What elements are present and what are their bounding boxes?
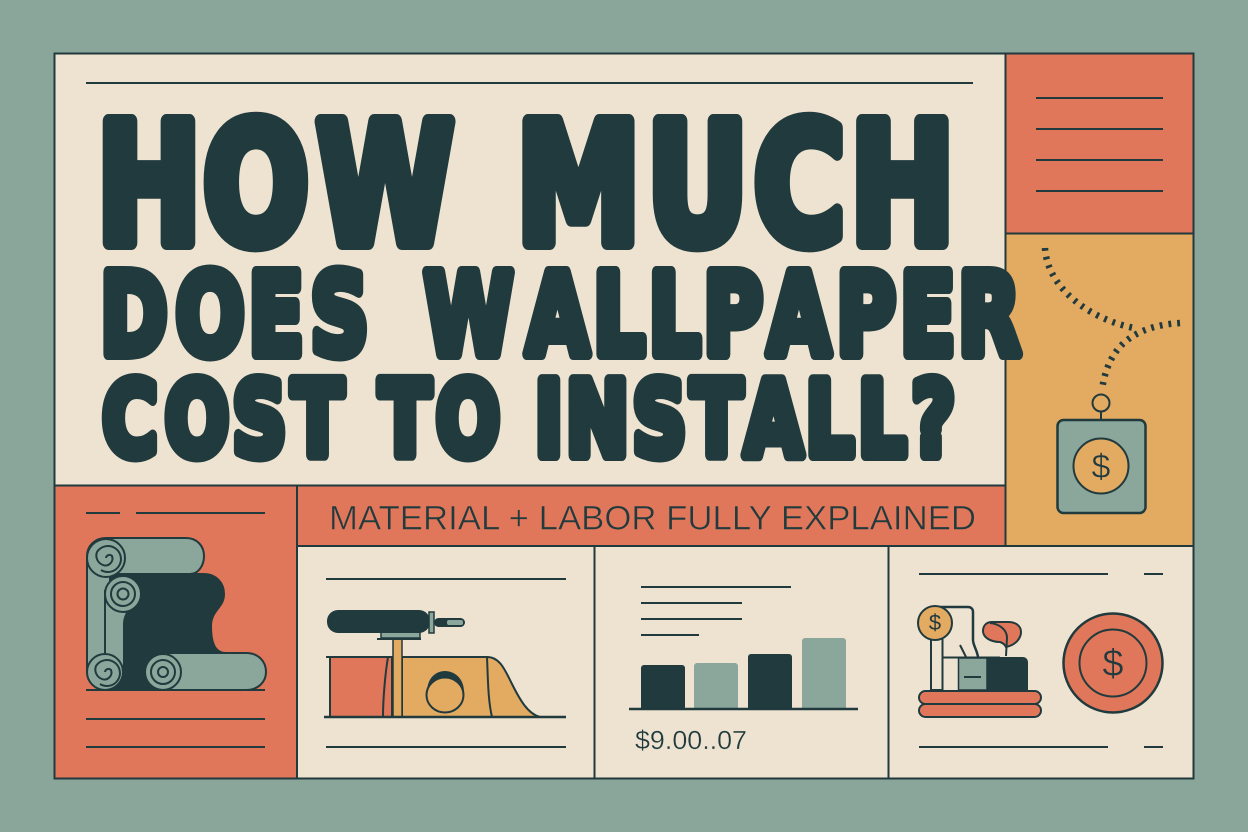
icon: dashed curves [1045,248,1180,390]
panel: red lines top right [1005,54,1193,233]
icon: large coin [1064,614,1162,712]
panel: bar chart [594,546,888,778]
title text: MUCH [517,89,955,282]
title text: WALLPAPER [424,251,1021,382]
icon: price tag with dollar [1058,394,1146,513]
panel: cost icons [888,546,1193,778]
title text: HOW [97,89,454,282]
price label: $9.00..07 [635,725,747,755]
title text: INSTALL? [535,360,955,480]
panel: title [55,54,1005,485]
icon: large coin: $ [1102,643,1124,685]
icon: price tag with dollar: $ [1092,448,1111,486]
panel: subtitle banner: MATERIAL + LABOR FULLY EXPLAINED [329,500,976,538]
icon: wallpaper rolls [87,538,266,690]
icon: supplies stack: $ [929,610,941,635]
title text [97,89,1021,480]
panel: installation tool [297,546,594,778]
title text: COST [102,360,344,480]
bar chart [629,638,858,709]
title text: TO [379,360,500,480]
frame and dividers [54,53,1194,778]
panel: yellow price tag [1005,233,1193,546]
icon: wall and smoothing tool [326,610,540,717]
title text: DOES [100,251,369,382]
panel: red wallpaper rolls [55,486,297,778]
panel: subtitle banner [297,486,1005,546]
icon: supplies stack [918,606,1041,717]
